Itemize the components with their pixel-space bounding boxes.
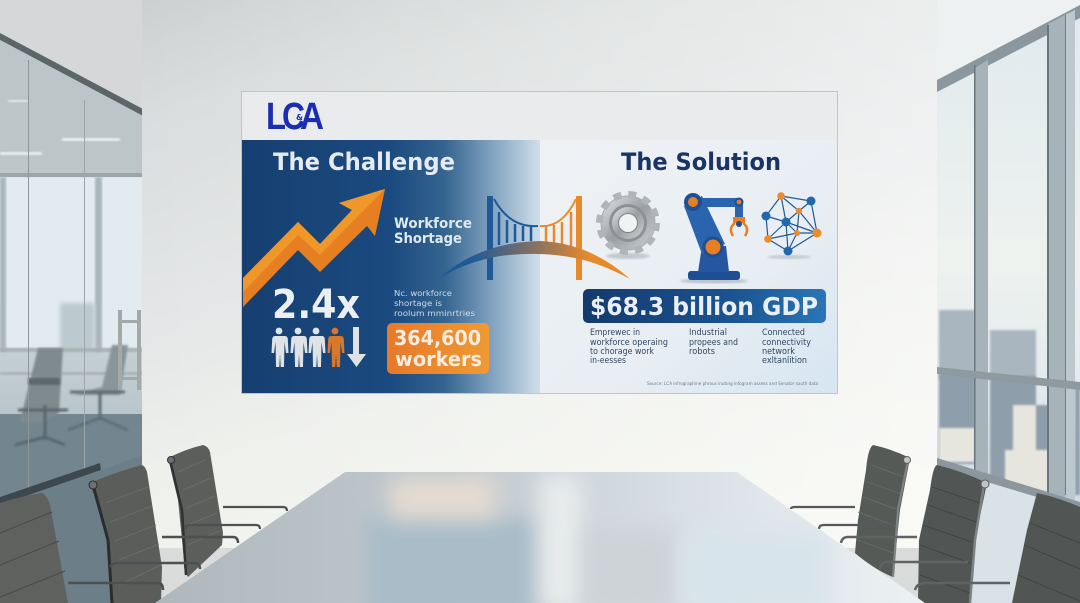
text: workforce shortage	[394, 216, 472, 247]
text: connected network	[762, 328, 811, 366]
text: shortage note: shortage is	[394, 299, 442, 308]
logo: LCA: A	[300, 96, 324, 138]
icon: steel gear	[600, 194, 656, 259]
panel: the solution background	[540, 140, 837, 393]
chairs: left rear	[168, 445, 223, 577]
source note: Source: LCA infrographine phrous inuting infogram assess and Senator sauth data	[647, 381, 818, 387]
left glass office background	[0, 0, 143, 603]
text: shortage note: Nc. workforce	[394, 289, 452, 298]
text: industrial robots: Industrial	[689, 328, 727, 338]
infographic board	[241, 91, 838, 394]
chairs: left front	[0, 493, 68, 603]
board header strip	[242, 92, 837, 141]
text: industrial robots: robots	[689, 347, 716, 357]
text: shortage note	[394, 289, 475, 318]
text: connected network: connectivity	[762, 338, 811, 348]
chair arms: left middle	[110, 537, 238, 569]
icon: bridge	[438, 196, 630, 280]
heading: the solution: The Solution	[621, 148, 781, 176]
icon: workers row	[272, 328, 344, 367]
logo: LCA	[266, 96, 324, 138]
text: empowered workforce: in-eesses	[590, 356, 627, 366]
callout: 364,600 workers	[387, 323, 489, 374]
chairs: right rear	[855, 445, 910, 577]
stat: 2.4x: 2.4x	[272, 282, 360, 328]
heading: the challenge: The Challenge	[273, 148, 455, 176]
icon: rising orange arrow	[243, 189, 385, 307]
callout: GDP banner: $68.3 billion GDP	[590, 292, 818, 321]
icon: robot arm	[680, 193, 748, 284]
logo: LCA: L	[266, 96, 286, 138]
text: empowered workforce: workforce operaing	[590, 338, 668, 348]
icon: connected network	[762, 192, 822, 259]
chair arm: left front	[68, 583, 163, 590]
chairs: right front	[1012, 493, 1080, 603]
chair arms: right middle	[841, 537, 1010, 590]
text: workforce shortage: Shortage	[394, 231, 462, 247]
text: industrial robots	[689, 328, 738, 357]
text: connected network: exltanlition	[762, 356, 807, 366]
floor strip behind table	[143, 548, 937, 603]
door handle	[118, 310, 141, 390]
right window background	[937, 0, 1080, 603]
logo: LCA: C	[282, 96, 305, 138]
panel: the challenge background	[242, 140, 540, 393]
text: connected network: network	[762, 347, 795, 357]
chair arms: left rear	[185, 507, 287, 529]
conference table	[150, 470, 940, 603]
chairs: left middle	[89, 465, 162, 603]
text: empowered workforce: Emprewec in	[590, 328, 640, 338]
chair arms: right rear	[791, 507, 893, 529]
logo: LCA: &	[296, 113, 303, 122]
text: industrial robots: propees and	[689, 338, 738, 348]
text: connected network: Connected	[762, 328, 805, 338]
callout: 364,600 workers: 364,600	[394, 326, 481, 350]
text: workforce shortage: Workforce	[394, 216, 472, 232]
text: empowered workforce	[590, 328, 668, 366]
callout: 364,600 workers: workers	[395, 347, 482, 371]
text: shortage note: roolum mminrtries	[394, 309, 475, 318]
office wall	[142, 0, 937, 603]
chairs: right middle	[918, 465, 989, 603]
icon: down arrow	[347, 327, 366, 367]
text: empowered workforce: to chorage work	[590, 347, 654, 357]
